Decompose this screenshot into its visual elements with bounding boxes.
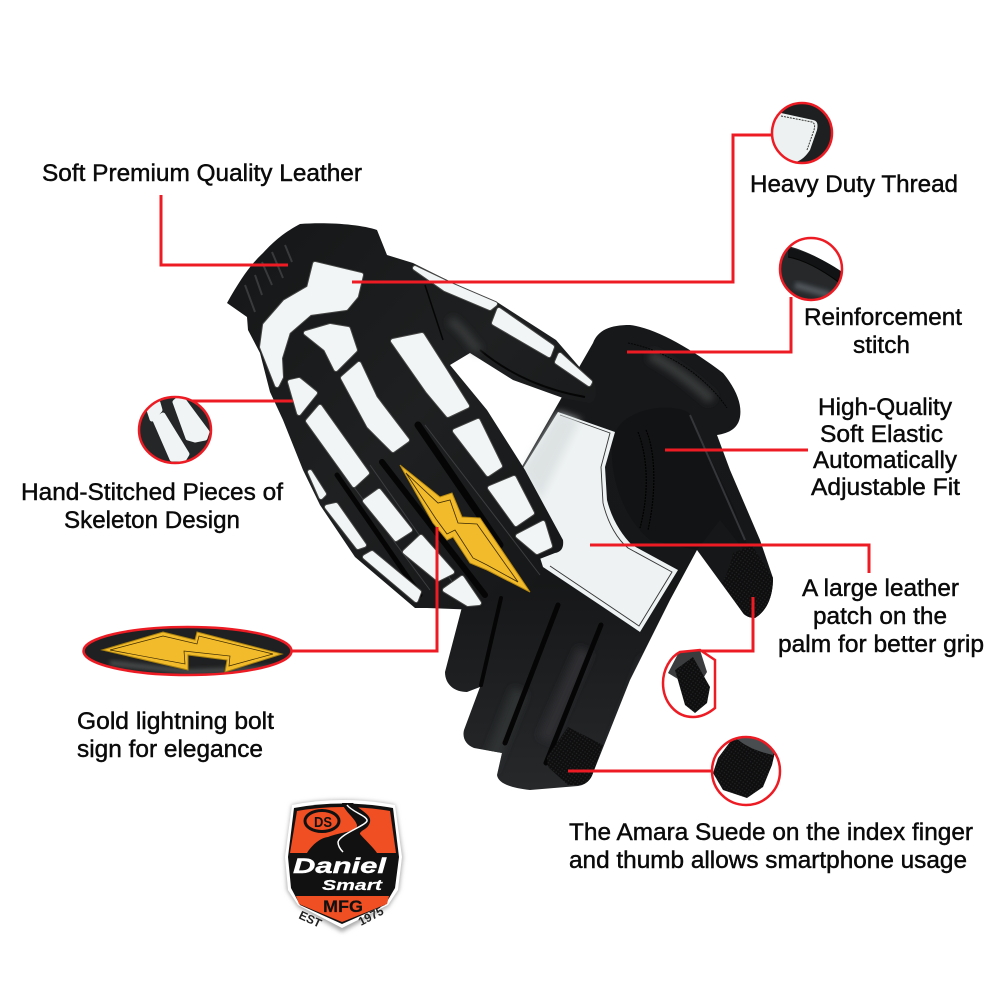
thumb shading [425, 285, 443, 340]
logo: Daniel Smart MFG: MFG [323, 897, 363, 916]
logo: Daniel Smart MFG: 1975 [356, 904, 386, 929]
inset: gold lightning bolt [84, 627, 292, 675]
shield shadow [285, 800, 403, 932]
label: skeleton design: Skeleton Design [64, 507, 240, 534]
label: gold lightning bolt [77, 708, 274, 763]
left glove skeleton back view [227, 223, 596, 610]
shield body [288, 804, 399, 924]
label: elastic adjustable fit: Adjustable Fit [811, 474, 960, 501]
label: reinforcement stitch: Reinforcement [804, 304, 962, 331]
label: skeleton design [21, 479, 283, 534]
logo: Daniel Smart MFG: DS [314, 814, 332, 831]
leather highlights [650, 355, 712, 400]
label: amara suede: and thumb allows smartphone usage [569, 847, 967, 874]
cuff wrinkles [245, 245, 292, 312]
label: amara suede [569, 819, 973, 874]
label: amara suede: The Amara Suede on the index finger [569, 819, 973, 846]
label: elastic adjustable fit: Automatically [813, 447, 957, 474]
label: skeleton design: Hand-Stitched Pieces of [21, 479, 283, 506]
label: gold lightning bolt: Gold lightning bolt [77, 708, 274, 735]
label: leather palm patch: A large leather [802, 575, 959, 602]
label: reinforcement stitch [804, 304, 962, 359]
label: leather palm patch [778, 575, 984, 658]
logo: Daniel Smart MFG: Daniel [293, 855, 388, 878]
label: reinforcement stitch: stitch [853, 332, 910, 359]
inset: index finger suede [712, 732, 780, 805]
logo: Daniel Smart MFG: Smart [322, 877, 383, 894]
white palm patch [522, 412, 678, 632]
amara suede index tip [547, 727, 603, 785]
inset: skeleton pieces [139, 397, 211, 463]
DS emblem [305, 810, 339, 832]
label: elastic adjustable fit: High-Quality [818, 394, 952, 421]
right glove palm view [445, 325, 773, 790]
logo: Daniel Smart MFG: EST [297, 908, 324, 931]
top orange panel [290, 807, 396, 853]
knuckle slots [418, 425, 500, 545]
label: elastic adjustable fit [811, 394, 960, 501]
inset: heavy duty thread [770, 103, 832, 166]
finger slots [481, 598, 501, 685]
amara suede thumb tip [722, 545, 773, 618]
glove body [445, 325, 773, 790]
bottom orange panel [296, 896, 389, 922]
inset: thumb suede [663, 650, 715, 717]
cuff seam stitch [628, 343, 727, 408]
palm pad [612, 408, 752, 560]
gold lightning bolt [400, 465, 530, 592]
inset: reinforcement stitch [775, 238, 845, 305]
label: gold lightning bolt: sign for elegance [77, 736, 263, 763]
shield rim [285, 800, 402, 928]
skeleton bones [262, 264, 590, 604]
label: leather palm patch: palm for better grip [778, 631, 984, 658]
label: heavy duty thread: Heavy Duty Thread [750, 171, 958, 198]
label: elastic adjustable fit: Soft Elastic [820, 421, 943, 448]
logo: Daniel Smart MFG [285, 800, 403, 932]
label: soft premium leather: Soft Premium Quality Leather [42, 160, 362, 187]
road [307, 803, 377, 853]
label: leather palm patch: patch on the [813, 603, 947, 630]
leader lines [161, 135, 869, 771]
glove body [227, 223, 596, 610]
